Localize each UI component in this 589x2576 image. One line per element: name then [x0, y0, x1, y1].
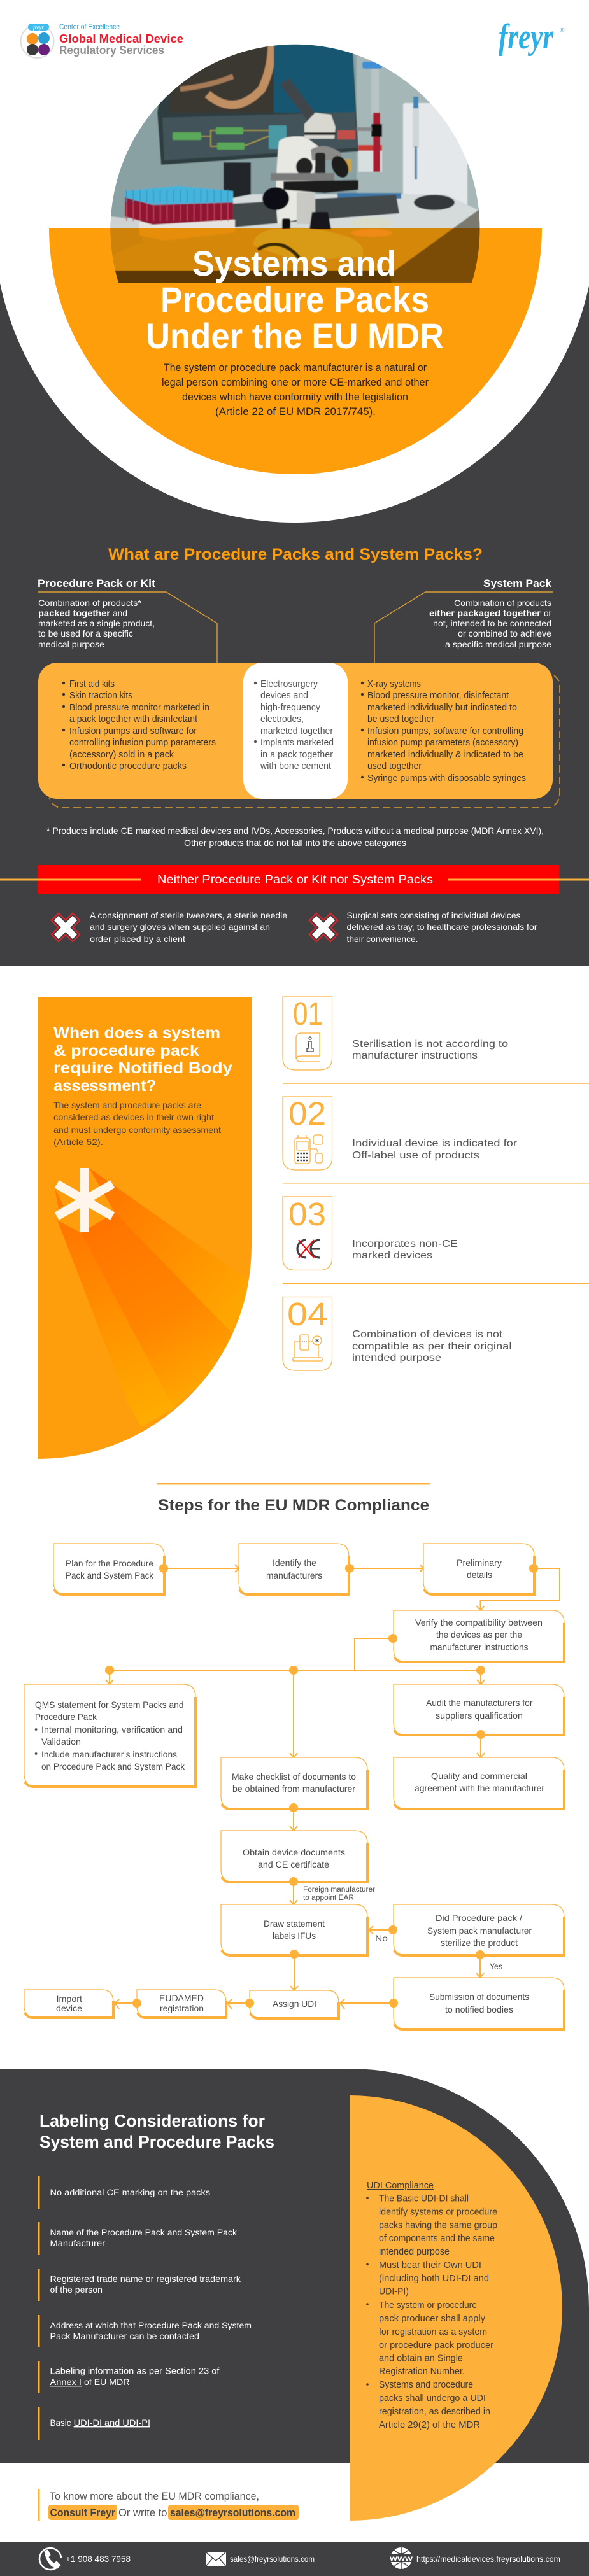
- item: manufacturer name: Manufacturer: [50, 2238, 105, 2248]
- list: borderline examples: Electrosurgery: [260, 679, 318, 689]
- list: borderline examples: [254, 679, 334, 771]
- list: procedure pack examples: [62, 679, 216, 771]
- step: quality agreement: Quality and commercial: [431, 1771, 527, 1781]
- item: labeling information: [38, 2361, 220, 2393]
- list: system pack examples: be used together: [367, 714, 434, 724]
- UDI bullets: Registration Number.: [379, 2367, 465, 2377]
- title: [146, 243, 444, 356]
- UDI bullets: pack producer shall apply: [379, 2314, 486, 2324]
- step: QMS statement: [24, 1684, 195, 1787]
- item: basic UDI: Basic: [50, 2418, 71, 2428]
- labeling list: [38, 2176, 252, 2440]
- step: obtain documents: [221, 1831, 367, 1882]
- intro text: legal person combining one or more CE-marked and other: [162, 377, 429, 388]
- UDI bullets: intended purpose: [379, 2247, 450, 2257]
- step: QMS statement: Validation: [41, 1736, 81, 1747]
- step: audit: [394, 1684, 564, 1735]
- list: borderline examples: marketed together: [260, 726, 333, 736]
- card 04 text: Combination of devices is not: [352, 1329, 503, 1340]
- card 04: 04: [287, 1296, 328, 1332]
- card 03: 03: [288, 1196, 326, 1232]
- UDI bullets: and obtain an Single: [379, 2354, 463, 2364]
- step: QMS statement: Include manufacturer’s instructions: [41, 1749, 177, 1759]
- list: system pack examples: Syringe pumps with disposable syringes: [367, 773, 526, 784]
- exclusion text 2: [346, 910, 537, 944]
- definition: system pack: [374, 577, 553, 663]
- UDI bullets: The system or procedure: [379, 2300, 477, 2311]
- label: no: No: [375, 1934, 388, 1943]
- definition: procedure pack or kit: and: [113, 608, 127, 618]
- call to action: To know more about the EU MDR compliance,: [50, 2491, 259, 2502]
- step: submission: to notified bodies: [445, 2004, 513, 2015]
- title: Procedure Packs: [160, 279, 429, 320]
- card 02: 02: [288, 1095, 326, 1132]
- call to action: Or write to: [118, 2507, 167, 2519]
- light rays: [55, 1168, 252, 1427]
- label: yes: Yes: [490, 1962, 502, 1971]
- logo: center of excellence: freyr: [33, 24, 44, 31]
- heading: When does a system: [53, 1024, 220, 1042]
- card 04 text: [352, 1329, 512, 1363]
- item: address: Pack Manufacturer can be contacted: [50, 2331, 199, 2341]
- list: procedure pack examples: First aid kits: [69, 679, 115, 689]
- panel: UDI compliance semicircle: UDI Compliance: [367, 2181, 434, 2191]
- list: system pack examples: [361, 679, 526, 784]
- item: labeling information: Annex I: [50, 2377, 82, 2387]
- item: address: Address at which that Procedure Pack and System: [50, 2320, 252, 2330]
- item: trade name: of the person: [50, 2284, 103, 2295]
- intro text: devices which have conformity with the legislation: [182, 391, 408, 403]
- call to action: Consult Freyr: [50, 2507, 116, 2519]
- icon: envelope: [206, 2552, 226, 2566]
- heading: labeling considerations: Labeling Considerations for: [39, 2111, 265, 2130]
- body text: The system and procedure packs are: [53, 1100, 201, 1110]
- card 02 text: [352, 1138, 517, 1161]
- logo: center of excellence: Global Medical Device: [59, 32, 183, 45]
- item: basic UDI: [38, 2407, 150, 2440]
- list: procedure pack examples: controlling infusion pump parameters: [69, 738, 216, 748]
- list: borderline examples: with bone cement: [260, 761, 331, 771]
- icon: globe: [389, 2547, 413, 2569]
- definition: procedure pack or kit: marketed as a single product,: [38, 618, 155, 628]
- card 03 text: [352, 1239, 458, 1261]
- step: verify: Verify the compatibility between: [415, 1617, 543, 1628]
- step: verify: the devices as per the: [436, 1629, 522, 1640]
- label: foreign manufacturer: to appoint EAR: [303, 1894, 354, 1902]
- step: checklist: be obtained from manufacturer: [232, 1784, 355, 1794]
- dark background of hero and definitions: [0, 222, 589, 966]
- UDI bullets: or procedure pack producer: [379, 2340, 493, 2351]
- icon: incompatible laptop and phone: [293, 1335, 322, 1361]
- card 02 text: Individual device is indicated for: [352, 1138, 517, 1149]
- UDI bullets: Systems and procedure: [379, 2380, 473, 2390]
- step: identify: manufacturers: [266, 1570, 322, 1580]
- card 01: [283, 996, 332, 1070]
- icon: instruction book: [296, 1033, 320, 1062]
- logo: center of excellence: Regulatory Services: [59, 44, 164, 57]
- list: borderline examples: Implants marketed: [260, 738, 334, 748]
- connector dots: [105, 1564, 538, 2008]
- panel: UDI compliance semicircle: [350, 2095, 562, 2521]
- list: system pack examples: used together: [367, 761, 422, 771]
- heading: & procedure pack: [53, 1042, 199, 1060]
- definition: procedure pack or kit: packed together: [38, 608, 111, 618]
- intro text: (Article 22 of EU MDR 2017/745).: [215, 406, 376, 418]
- definition: procedure pack or kit: [38, 577, 217, 663]
- definition: procedure pack or kit: medical purpose: [38, 639, 104, 649]
- footnote: Other products that do not fall into the above categories: [184, 838, 406, 848]
- flowchart: [24, 1544, 564, 2029]
- definition: system pack: or: [544, 608, 551, 618]
- item: manufacturer name: [38, 2222, 238, 2255]
- icon: asterisk: [55, 1168, 115, 1232]
- icon: phone: [39, 2548, 61, 2570]
- step: quality agreement: [394, 1757, 564, 1809]
- logo: freyr: freyr: [499, 17, 554, 57]
- list: system pack examples: Blood pressure monitor, disinfectant: [367, 691, 509, 701]
- body text: considered as devices in their own right: [53, 1112, 214, 1122]
- definition: system pack: or combined to achieve: [458, 628, 551, 638]
- panel: labeling considerations background: [0, 2069, 589, 2463]
- card 01 text: Sterilisation is not according to: [352, 1039, 508, 1050]
- card 02 text: Off-label use of products: [352, 1150, 479, 1161]
- step: audit: Audit the manufacturers for: [426, 1698, 533, 1708]
- body text: (Article 52).: [53, 1137, 103, 1147]
- UDI bullets: registration, as described in: [379, 2407, 490, 2417]
- orange semicircle: [49, 228, 542, 474]
- step: checklist: Make checklist of documents to: [232, 1771, 356, 1782]
- label: foreign manufacturer: Foreign manufacturer: [303, 1886, 375, 1894]
- footer bar: [0, 2542, 589, 2576]
- exclusion text 1: [90, 910, 287, 944]
- card 04 text: compatible as per their original: [352, 1341, 512, 1352]
- intro text: [162, 362, 429, 418]
- definition: system pack: either packaged together: [429, 608, 541, 618]
- hero photo: microscope in a lab: [108, 38, 490, 286]
- step: preliminary: details: [467, 1570, 492, 1580]
- card 03 text: marked devices: [352, 1250, 432, 1261]
- heading: labeling considerations: [39, 2111, 274, 2151]
- list: procedure pack examples: (accessory) sold in a pack: [69, 750, 174, 760]
- card 01: 01: [293, 996, 323, 1032]
- title: Systems and: [192, 243, 396, 283]
- list: borderline examples: devices and: [260, 691, 308, 701]
- step: audit: suppliers qualification: [436, 1710, 523, 1721]
- website: https://medicaldevices.freyrsolutions.com: [416, 2554, 560, 2564]
- step: submission: [394, 1978, 564, 2029]
- UDI bullets: of components and the same: [379, 2234, 495, 2244]
- UDI bullets: identify systems or procedure: [379, 2207, 497, 2218]
- step: QMS statement: QMS statement for System Packs and: [35, 1700, 183, 1710]
- UDI bullets: UDI-PI): [379, 2286, 409, 2297]
- item: trade name: [38, 2269, 241, 2301]
- exclusion text 1: order placed by a client: [90, 934, 185, 944]
- step: verify: [394, 1610, 564, 1662]
- definition: system pack: a specific medical purpose: [445, 639, 551, 649]
- exclusion text 2: their convenience.: [346, 934, 418, 944]
- step: draw statement: labels IFUs: [273, 1931, 316, 1941]
- step: quality agreement: agreement with the manufacturer: [415, 1783, 544, 1793]
- step: assign UDI: Assign UDI: [273, 1999, 316, 2009]
- step: plan: [53, 1544, 164, 1594]
- card 04 text: intended purpose: [352, 1353, 441, 1363]
- intro text: The system or procedure pack manufacturer is a natural or: [164, 362, 427, 374]
- list: system pack examples: X-ray systems: [367, 679, 421, 689]
- card 03 text: Incorporates non-CE: [352, 1239, 458, 1249]
- step: preliminary: [423, 1544, 534, 1594]
- step: draw statement: Draw statement: [264, 1918, 325, 1929]
- list: procedure pack examples: Blood pressure monitor marketed in: [69, 703, 209, 713]
- title: Under the EU MDR: [146, 316, 444, 356]
- item: no CE marking: No additional CE marking on the packs: [50, 2187, 210, 2197]
- email: sales@freyrsolutions.com: [230, 2554, 315, 2564]
- list: system pack examples: infusion pump parameters (accessory): [367, 738, 518, 748]
- banner: neither pack: [0, 865, 589, 894]
- definition: procedure pack or kit: Procedure Pack or Kit: [38, 577, 155, 589]
- item: labeling information: of EU MDR: [84, 2377, 130, 2387]
- step: EUDAMED: EUDAMED: [159, 1993, 204, 2003]
- item: basic UDI: UDI-DI and UDI-PI: [74, 2418, 150, 2428]
- step: verify: manufacturer instructions: [430, 1642, 529, 1652]
- heading: labeling considerations: System and Procedure Packs: [39, 2132, 274, 2151]
- card 02: [283, 1095, 332, 1170]
- step: plan: Plan for the Procedure: [66, 1558, 153, 1568]
- heading: steps: Steps for the EU MDR Compliance: [158, 1496, 429, 1514]
- list: system pack examples: Infusion pumps, software for controlling: [367, 726, 523, 736]
- UDI bullets: packs having the same group: [379, 2220, 497, 2230]
- item: labeling information: Labeling information as per Section 23 of: [50, 2365, 220, 2375]
- heading: [53, 1024, 232, 1095]
- step: QMS statement: Internal monitoring, verification and: [41, 1724, 183, 1735]
- icon: red cross 1: [59, 920, 73, 934]
- list: procedure pack examples: Skin traction kits: [69, 691, 132, 701]
- step: sterilize decision: sterilize the product: [441, 1938, 518, 1948]
- card 01 text: [352, 1039, 508, 1061]
- definition: system pack: Combination of products: [454, 598, 551, 608]
- UDI bullets: [366, 2193, 497, 2430]
- step: checklist: [221, 1757, 367, 1809]
- UDI bullets: for registration as a system: [379, 2327, 487, 2337]
- step: import: [24, 1990, 113, 2018]
- step: obtain documents: Obtain device documents: [243, 1847, 345, 1857]
- step: QMS statement: on Procedure Pack and System Pack: [41, 1761, 185, 1771]
- step: import: Import: [56, 1994, 82, 2004]
- card 01 text: manufacturer instructions: [352, 1050, 478, 1061]
- icon: red cross 2: [316, 920, 330, 934]
- step: EUDAMED: registration: [160, 2003, 204, 2013]
- definition: procedure pack or kit: to be used for a specific: [38, 628, 133, 638]
- item: manufacturer name: Name of the Procedure Pack and System Pack: [50, 2227, 238, 2237]
- call to action: [38, 2489, 299, 2521]
- list: system pack examples: marketed individually but indicated to: [367, 703, 517, 713]
- exclusion text 2: Surgical sets consisting of individual devices: [346, 910, 521, 920]
- list: borderline examples: electrodes,: [260, 714, 304, 724]
- panel: notified body assessment: [38, 997, 252, 1459]
- item: trade name: Registered trade name or registered trademark: [50, 2274, 241, 2284]
- definition: system pack: not, intended to be connected: [433, 618, 551, 628]
- footnote: [46, 826, 544, 848]
- card 04: [283, 1296, 332, 1370]
- panel: examples venn box: [38, 663, 553, 799]
- orange multiply band over photo: [108, 228, 484, 285]
- UDI bullets: The Basic UDI-DI shall: [379, 2193, 469, 2204]
- step: obtain documents: and CE certificate: [258, 1859, 329, 1869]
- step: draw statement: [221, 1904, 367, 1955]
- definition: system pack: System Pack: [483, 577, 552, 589]
- UDI bullets: Must bear their Own UDI: [379, 2260, 481, 2270]
- list: procedure pack examples: Infusion pumps and software for: [69, 726, 197, 736]
- icon: globe: www: [389, 2555, 413, 2563]
- card 03: [283, 1196, 332, 1270]
- list: procedure pack examples: a pack together with disinfectant: [69, 714, 197, 724]
- connectors: [106, 1565, 560, 2009]
- step: plan: Pack and System Pack: [66, 1570, 154, 1580]
- body text: [53, 1100, 221, 1147]
- step: import: device: [56, 2003, 82, 2013]
- step: assign UDI: [250, 1990, 339, 2018]
- icon: crossed CE mark: [297, 1240, 320, 1258]
- UDI bullets: Article 29(2) of the MDR: [379, 2420, 480, 2430]
- exclusion text 2: delivered as tray, to healthcare professionals for: [346, 922, 537, 932]
- body text: and must undergo conformity assessment: [53, 1125, 221, 1135]
- step: identify: Identify the: [273, 1558, 316, 1568]
- logo: center of excellence: [20, 22, 183, 58]
- step: sterilize decision: System pack manufacturer: [427, 1925, 532, 1936]
- label: foreign manufacturer: [303, 1886, 375, 1902]
- list: borderline examples: in a pack together: [260, 750, 333, 760]
- item: address: [38, 2315, 252, 2347]
- heading: what are packs: What are Procedure Packs and System Packs?: [108, 545, 483, 563]
- exclusion text 1: and surgery gloves when supplied against an: [90, 922, 270, 932]
- step: EUDAMED: [137, 1990, 226, 2018]
- icon: handheld device: [295, 1135, 323, 1164]
- exclusion text 1: A consignment of sterile tweezers, a sterile needle: [90, 910, 287, 920]
- step: identify: [239, 1544, 349, 1594]
- footnote: * Products include CE marked medical devices and IVDs, Accessories, Products without a medical purpose (MDR Annex XVI),: [46, 826, 544, 836]
- phone number: +1 908 483 7958: [66, 2554, 131, 2564]
- step: submission: Submission of documents: [429, 1992, 529, 2002]
- logo: center of excellence: Center of Excellence: [59, 22, 120, 31]
- step: QMS statement: Procedure Pack: [35, 1712, 97, 1722]
- heading: assessment?: [53, 1077, 156, 1095]
- call to action: sales@freyrsolutions.com: [170, 2507, 295, 2519]
- list: system pack examples: marketed individually & indicated to be: [367, 750, 523, 760]
- UDI bullets: (including both UDI-DI and: [379, 2274, 489, 2284]
- logo: freyr: ®: [560, 27, 565, 34]
- step: sterilize decision: Did Procedure pack /: [436, 1913, 522, 1923]
- definition: procedure pack or kit: Combination of products*: [38, 598, 142, 608]
- white hero circle: [0, 0, 589, 523]
- step: sterilize decision: [394, 1904, 564, 1955]
- step: preliminary: Preliminary: [457, 1558, 502, 1568]
- list: procedure pack examples: Orthodontic procedure packs: [69, 761, 187, 771]
- banner: neither pack: Neither Procedure Pack or Kit nor System Packs: [157, 873, 433, 887]
- heading: require Notified Body: [53, 1059, 232, 1077]
- UDI bullets: packs shall undergo a UDI: [379, 2393, 486, 2404]
- list: borderline examples: high-frequency: [260, 703, 321, 713]
